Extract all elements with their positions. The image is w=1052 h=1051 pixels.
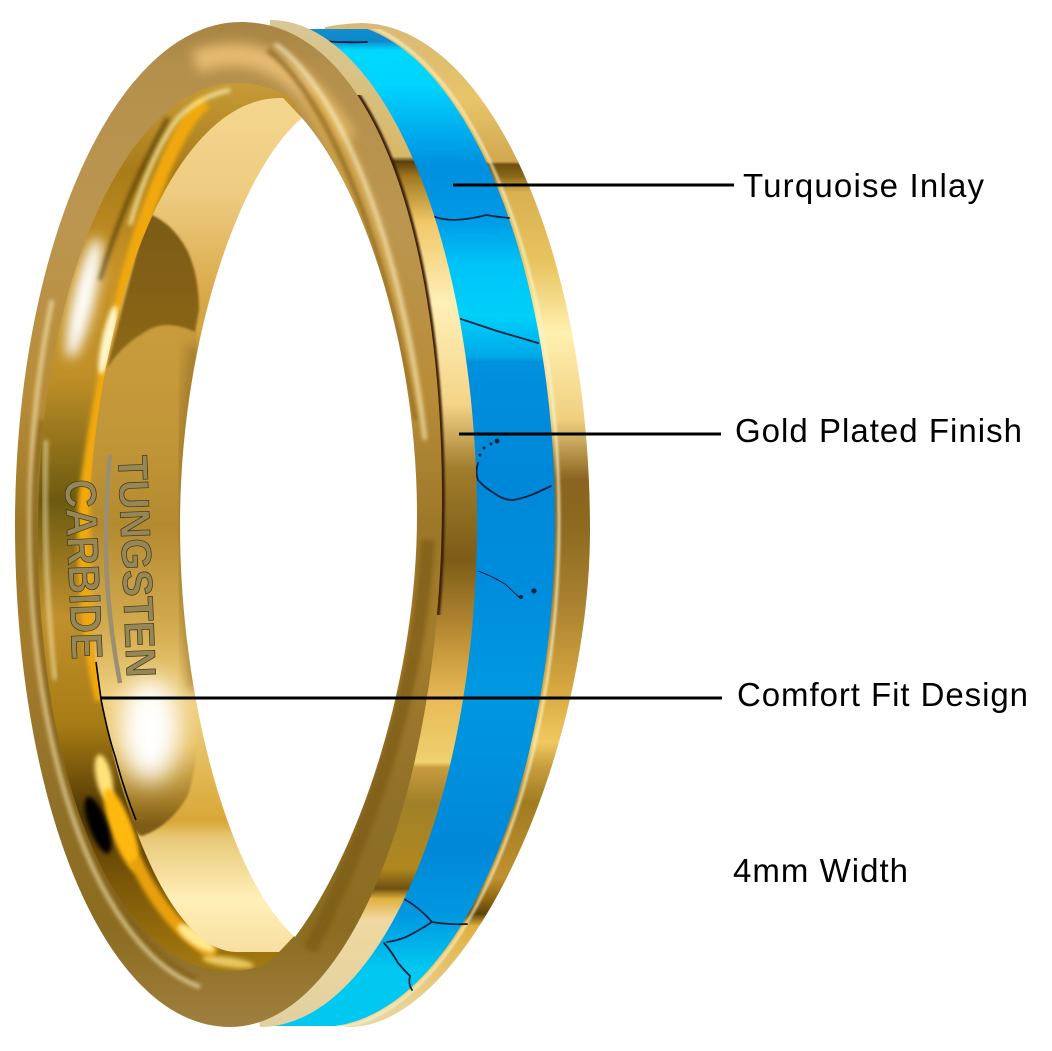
label: Comfort Fit Design: Comfort Fit Design — [737, 676, 1028, 713]
inner rim reflective band — [38, 83, 320, 971]
callout line: turquoise inlay — [453, 184, 734, 186]
engraved underline — [106, 455, 120, 683]
label: 4mm Width: 4mm Width — [733, 852, 908, 889]
dark step between stripe and face — [357, 95, 446, 615]
dark groove line — [96, 662, 136, 820]
engraving: tungsten carbide — [55, 454, 165, 683]
pale highlight line beside inlay — [320, 19, 559, 1030]
label: Turquoise Inlay: Turquoise Inlay — [743, 167, 984, 204]
turquoise inlay — [240, 19, 559, 1030]
ring front face — [15, 22, 442, 1027]
inner wall — [87, 98, 320, 952]
callout line: comfort fit design — [101, 696, 722, 700]
ring outer gold band (far edge) — [290, 23, 590, 1027]
gold stripe beside inlay — [240, 20, 477, 1027]
label: Gold Plated Finish: Gold Plated Finish — [735, 412, 1022, 449]
engraved word TUNGSTEN: TUNGSTEN — [109, 454, 165, 678]
tungsten ring illustration — [15, 19, 590, 1030]
vein specks — [478, 439, 537, 599]
callout line: gold plated finish — [459, 432, 721, 436]
ring hole — [180, 118, 417, 937]
turquoise veins — [321, 41, 551, 990]
rim reflections — [45, 90, 254, 971]
inner wall reflections — [80, 213, 199, 836]
face highlights — [30, 44, 428, 987]
engraved word CARBIDE: CARBIDE — [55, 478, 111, 660]
